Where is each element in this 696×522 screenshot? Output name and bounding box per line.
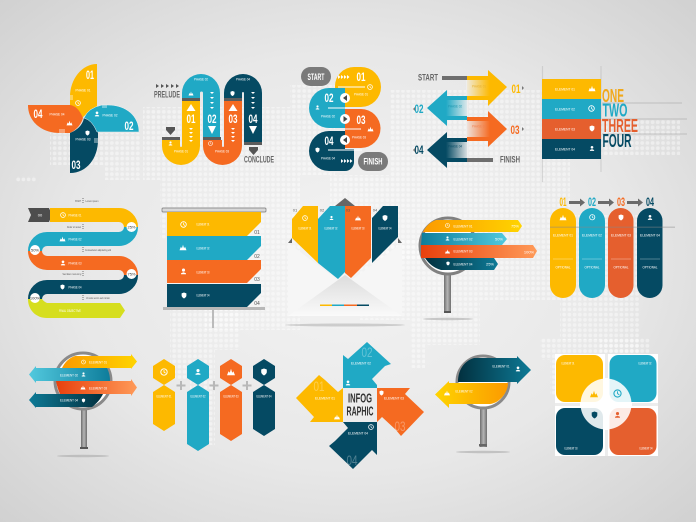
plus signs bbox=[176, 381, 252, 390]
arrow labels: ELEMENT 03 bbox=[384, 396, 405, 400]
number labels: 01 bbox=[356, 70, 366, 84]
start label: START bbox=[308, 72, 325, 82]
strip labels: ELEMENT 01 bbox=[298, 226, 312, 230]
arrow text bbox=[448, 84, 487, 148]
strip numbers bbox=[293, 208, 378, 212]
bar labels: 75% bbox=[511, 224, 519, 228]
phase numbers: PHASE 02 bbox=[194, 76, 209, 82]
phase numbers bbox=[174, 76, 258, 154]
quadrant labels bbox=[562, 360, 653, 450]
orange pill bbox=[608, 208, 634, 298]
start pill bbox=[301, 67, 331, 86]
block labels bbox=[555, 86, 576, 152]
tiny arrows bbox=[189, 92, 255, 142]
quadrant labels: ELEMENT 03 bbox=[564, 446, 578, 450]
pill labels: OPTIONAL bbox=[614, 264, 629, 270]
block labels: ELEMENT 01 bbox=[555, 86, 576, 92]
number labels: 03 bbox=[356, 113, 366, 127]
phase numbers: PHASE 03 bbox=[215, 148, 230, 154]
pill icons bbox=[316, 85, 374, 152]
play glyphs bbox=[343, 95, 348, 143]
magnifier arrows infographic bbox=[29, 353, 137, 457]
percent labels: 100% bbox=[30, 296, 41, 300]
arrow numbers: 01 bbox=[512, 82, 521, 96]
strip numbers: 03 bbox=[346, 208, 351, 212]
quadrant 01 bbox=[556, 355, 603, 402]
percent labels: 75% bbox=[127, 272, 136, 276]
serpentine phases infographic bbox=[154, 74, 274, 166]
pill labels bbox=[553, 232, 661, 270]
teal band bbox=[35, 227, 131, 251]
projection screen infographic bbox=[162, 208, 266, 328]
number labels: 02 bbox=[324, 91, 334, 105]
arrow numbers bbox=[414, 82, 521, 157]
number labels: PHASE 01 bbox=[354, 92, 369, 96]
arrow labels: ELEMENT 03 bbox=[89, 386, 108, 390]
envelope flap bbox=[288, 275, 402, 316]
quadrant infographic bbox=[555, 354, 658, 456]
pinwheel labels: 01 bbox=[86, 68, 94, 82]
handle bbox=[444, 275, 451, 311]
block 01 bbox=[542, 79, 601, 99]
phase numbers: PHASE 04 bbox=[236, 76, 251, 82]
pinwheel labels: 04 bbox=[34, 107, 43, 121]
hexagon labels: ELEMENT 01 bbox=[156, 394, 172, 398]
headings bbox=[560, 195, 654, 209]
arrow numbers: 04 bbox=[414, 143, 424, 157]
block labels: ELEMENT 03 bbox=[555, 126, 576, 132]
teal pill bbox=[579, 208, 605, 298]
hexagon labels: ELEMENT 03 bbox=[224, 394, 239, 398]
start label: START bbox=[418, 72, 438, 84]
lime band bbox=[28, 299, 125, 318]
arrow 03 bbox=[56, 379, 137, 396]
milestone notes: Dolor sit amet bbox=[67, 225, 81, 229]
number labels: PHASE 02 bbox=[321, 114, 336, 118]
milestone notes: Ut wisi enim ad minim bbox=[86, 296, 110, 300]
pill labels: OPTIONAL bbox=[584, 264, 600, 270]
heading arrows bbox=[569, 198, 643, 206]
finish label: FINISH bbox=[500, 154, 520, 166]
bar 04 bbox=[425, 258, 498, 270]
cross bbox=[580, 378, 632, 430]
infographic cross arrows bbox=[296, 342, 424, 469]
orange arrow bbox=[466, 111, 507, 147]
orange petal bbox=[28, 105, 83, 133]
bar 02 bbox=[421, 233, 507, 245]
navy pill bbox=[309, 131, 354, 171]
pinwheel labels: 03 bbox=[72, 158, 81, 172]
yellow arrow bbox=[435, 381, 508, 408]
winding road infographic bbox=[28, 198, 136, 318]
top hexagons bbox=[153, 359, 275, 385]
arrow labels: ELEMENT 01 bbox=[89, 360, 108, 364]
world map dots bbox=[15, 85, 680, 445]
pill labels: OPTIONAL bbox=[642, 264, 658, 270]
screen background bbox=[167, 212, 261, 307]
block 03 bbox=[542, 119, 601, 139]
arrow text: PHASE 02 bbox=[448, 104, 463, 108]
orange band bbox=[35, 251, 131, 275]
milestone notes: Consectetur adipiscing elit bbox=[85, 248, 111, 252]
bar 01 bbox=[423, 220, 522, 232]
band labels bbox=[59, 212, 82, 313]
pinwheel infographic bbox=[28, 64, 139, 173]
center circle bbox=[580, 378, 632, 430]
phase numbers: 02 bbox=[208, 112, 217, 126]
number labels bbox=[321, 70, 369, 160]
milestone notes: Lorem ipsum bbox=[86, 199, 99, 203]
arrow numbers: 02 bbox=[414, 102, 424, 116]
navy pill bbox=[637, 208, 662, 298]
phase numbers: 03 bbox=[228, 112, 238, 126]
start finish pills infographic bbox=[301, 67, 388, 171]
bar labels: ELEMENT 04 bbox=[454, 262, 473, 266]
corner numbers bbox=[254, 230, 260, 307]
handle foot bbox=[80, 447, 88, 449]
pill labels: ELEMENT 01 bbox=[553, 232, 574, 238]
start line bbox=[442, 76, 467, 80]
yellow strip bbox=[292, 206, 318, 263]
shadow line bbox=[550, 226, 675, 228]
strip numbers: 01 bbox=[293, 208, 298, 212]
bar labels: 25% bbox=[486, 262, 494, 266]
teal pill bbox=[309, 88, 345, 128]
corner numbers: 02 bbox=[254, 254, 260, 260]
milestone notes bbox=[62, 199, 111, 300]
arrow labels: ELEMENT 01 bbox=[315, 396, 336, 400]
band 04 bbox=[167, 284, 261, 307]
band icons bbox=[60, 213, 66, 290]
hexagons infographic bbox=[153, 359, 275, 451]
prelude arrows bbox=[156, 84, 179, 88]
phase numbers: 04 bbox=[248, 112, 258, 126]
bar labels: ELEMENT 02 bbox=[454, 236, 473, 242]
stand bbox=[212, 310, 214, 328]
quadrant 04 bbox=[610, 408, 656, 455]
arrow text: PHASE 04 bbox=[448, 144, 463, 148]
pill labels: ELEMENT 02 bbox=[582, 232, 603, 238]
hexagon labels bbox=[156, 394, 272, 398]
center icons bbox=[590, 390, 621, 418]
small pointers bbox=[413, 86, 524, 152]
arrow labels: ELEMENT 04 bbox=[348, 430, 369, 436]
arrow text: PHASE 03 bbox=[472, 124, 487, 128]
quadrant labels: ELEMENT 01 bbox=[562, 360, 575, 366]
navy arrow bbox=[329, 422, 377, 469]
numbered blocks infographic bbox=[542, 66, 687, 182]
optional pills infographic bbox=[550, 195, 675, 298]
navy arch bbox=[224, 74, 262, 142]
arrow labels: ELEMENT 04 bbox=[60, 398, 79, 402]
hexagon icons bbox=[161, 368, 267, 376]
block labels: ELEMENT 04 bbox=[555, 146, 576, 152]
band labels: PHASE 01 bbox=[68, 212, 82, 218]
strip numbers: 04 bbox=[373, 208, 378, 212]
rails bbox=[542, 66, 601, 182]
faint numbers: 04 bbox=[346, 452, 358, 468]
arrow labels: ELEMENT 02 bbox=[60, 372, 79, 378]
band labels: PHASE 03 bbox=[68, 260, 82, 266]
orange strip bbox=[345, 206, 371, 278]
milestone dashes bbox=[82, 198, 84, 301]
arrow labels: ELEMENT 02 bbox=[456, 388, 473, 394]
arrow labels: ELEMENT 02 bbox=[351, 360, 372, 366]
arrow numbers: 03 bbox=[510, 123, 520, 137]
magnifier two arrows infographic bbox=[435, 356, 531, 453]
bar labels: ELEMENT 03 bbox=[454, 248, 473, 254]
navy arrow bbox=[458, 356, 531, 384]
band icons bbox=[180, 222, 186, 298]
band labels bbox=[196, 222, 210, 298]
pill icons bbox=[560, 214, 652, 220]
block labels: ELEMENT 02 bbox=[555, 106, 576, 112]
side corners bbox=[288, 238, 402, 243]
headings: 04 bbox=[646, 195, 654, 209]
band labels: ELEMENT 03 bbox=[196, 270, 210, 274]
pinwheel labels: PHASE 03 bbox=[76, 136, 91, 142]
conclude triangle bbox=[249, 147, 258, 155]
top roller bbox=[162, 208, 266, 212]
yellow pill bbox=[335, 67, 381, 107]
handle foot bbox=[444, 311, 451, 313]
accents bbox=[59, 95, 107, 143]
band 03 bbox=[167, 260, 261, 283]
white lines bbox=[328, 87, 365, 150]
conclude label: CONCLUDE bbox=[244, 154, 274, 166]
band labels: FINAL OBJECTIVE bbox=[59, 308, 81, 313]
bar labels: 50% bbox=[495, 236, 503, 242]
white backing bbox=[555, 354, 658, 456]
magnifier bars infographic bbox=[420, 218, 537, 320]
percent labels: 25% bbox=[127, 224, 136, 230]
pill labels: ELEMENT 03 bbox=[611, 232, 632, 238]
phase numbers: PHASE 01 bbox=[174, 148, 189, 154]
faint numbers: 01 bbox=[314, 378, 325, 394]
faint numbers bbox=[314, 344, 406, 468]
strip icons bbox=[303, 215, 387, 221]
top triangle bbox=[335, 198, 355, 206]
band labels: ELEMENT 04 bbox=[196, 292, 210, 298]
percent labels: 50% bbox=[31, 248, 39, 252]
center title: INFOG bbox=[348, 390, 372, 406]
word labels: THREE bbox=[602, 116, 638, 136]
yellow arrow bbox=[466, 70, 507, 106]
pinwheel labels: 02 bbox=[124, 119, 134, 133]
pinwheel labels bbox=[34, 68, 134, 172]
center title bbox=[346, 390, 374, 418]
arrow 04 bbox=[29, 392, 103, 408]
handle bbox=[81, 410, 87, 447]
handle bbox=[480, 409, 487, 447]
start tag label: 00 bbox=[38, 212, 43, 218]
center square bbox=[343, 388, 377, 422]
yellow band bbox=[50, 215, 131, 227]
pill labels: ELEMENT 04 bbox=[640, 232, 661, 238]
arrow labels bbox=[60, 360, 108, 402]
band 01 bbox=[167, 212, 261, 236]
prelude triangle bbox=[166, 127, 175, 135]
bar labels: ELEMENT 01 bbox=[454, 224, 473, 228]
arrow labels bbox=[456, 364, 510, 394]
hexagon labels: ELEMENT 02 bbox=[190, 394, 206, 398]
pinwheel labels: PHASE 04 bbox=[50, 112, 65, 116]
word labels: FOUR bbox=[602, 131, 632, 151]
small arrows bbox=[338, 75, 352, 163]
pinwheel icons bbox=[66, 101, 99, 136]
start tag bbox=[28, 208, 52, 222]
finish pill bbox=[358, 152, 388, 171]
quadrant labels: ELEMENT 04 bbox=[640, 446, 653, 450]
shadow bbox=[423, 318, 473, 320]
orange pill bbox=[345, 109, 380, 148]
bar labels: 100% bbox=[524, 250, 535, 254]
headings: 01 bbox=[560, 195, 567, 209]
milestone notes: START bbox=[75, 199, 81, 203]
arrow labels bbox=[315, 360, 405, 436]
headings: 03 bbox=[617, 195, 625, 209]
corner numbers: 03 bbox=[254, 277, 260, 283]
color bar bbox=[320, 304, 369, 306]
grey bars bbox=[162, 98, 262, 145]
teal arch bbox=[182, 74, 220, 137]
corner numbers: 04 bbox=[254, 301, 260, 307]
block 02 bbox=[542, 99, 601, 119]
center title: RAPHIC bbox=[346, 404, 374, 418]
teal petal bbox=[84, 105, 139, 132]
teal arrow bbox=[343, 342, 391, 388]
envelope body bbox=[288, 243, 402, 316]
four arrows infographic bbox=[413, 70, 524, 168]
arrow icons bbox=[334, 380, 384, 429]
arrow icons bbox=[444, 366, 520, 395]
arrow icons bbox=[80, 360, 86, 402]
quadrant 02 bbox=[610, 355, 656, 402]
prelude label: PRELUDE bbox=[154, 90, 180, 100]
corner numbers: 01 bbox=[254, 230, 260, 236]
orange arrow bbox=[377, 388, 424, 436]
yellow petal bbox=[70, 64, 97, 120]
divider bbox=[555, 354, 658, 456]
bar labels bbox=[454, 224, 535, 266]
navy arrow bbox=[427, 132, 468, 168]
band labels: ELEMENT 02 bbox=[196, 246, 210, 250]
arrow labels: ELEMENT 01 bbox=[492, 364, 510, 368]
quadrant 03 bbox=[556, 408, 603, 455]
handle foot bbox=[479, 444, 487, 446]
word labels bbox=[602, 86, 638, 151]
envelope shadow bbox=[285, 324, 405, 326]
percent labels bbox=[30, 224, 136, 300]
teal arrow bbox=[427, 90, 468, 126]
milestone notes: Sed diam nonummy bbox=[62, 272, 82, 276]
faint numbers: 03 bbox=[394, 418, 406, 434]
navy band bbox=[35, 275, 131, 299]
band 02 bbox=[167, 236, 261, 260]
yellow pill bbox=[550, 208, 576, 298]
hexagon labels: ELEMENT 04 bbox=[256, 394, 272, 398]
shadow bbox=[456, 451, 510, 453]
envelope infographic bbox=[285, 198, 405, 326]
phase icons bbox=[169, 91, 234, 146]
arrow 01 bbox=[62, 354, 137, 369]
percent circles bbox=[30, 222, 136, 303]
quadrant labels: ELEMENT 02 bbox=[638, 360, 652, 366]
arrow text: PHASE 01 bbox=[472, 84, 487, 88]
white triangles bbox=[186, 104, 257, 134]
lens ring bbox=[55, 353, 111, 409]
bar 03 bbox=[421, 245, 537, 258]
block shadows bbox=[602, 102, 687, 135]
teal strip bbox=[318, 206, 345, 279]
lower columns bbox=[153, 385, 275, 451]
arrow 02 bbox=[29, 366, 110, 383]
number labels: 04 bbox=[324, 134, 334, 148]
number labels: PHASE 03 bbox=[352, 134, 367, 140]
strip labels: ELEMENT 02 bbox=[324, 226, 338, 230]
pill dividers bbox=[553, 258, 660, 260]
word labels: ONE bbox=[602, 86, 624, 106]
headings: 02 bbox=[588, 195, 596, 209]
strip numbers: 02 bbox=[320, 208, 325, 212]
band labels: PHASE 02 bbox=[68, 236, 82, 242]
strip labels: ELEMENT 04 bbox=[378, 226, 392, 230]
word labels: TWO bbox=[602, 100, 628, 120]
block 04 bbox=[542, 139, 601, 159]
band labels: ELEMENT 01 bbox=[196, 222, 210, 226]
phase numbers: 01 bbox=[186, 112, 196, 126]
pinwheel labels: PHASE 02 bbox=[102, 112, 118, 118]
lens ring bbox=[457, 356, 509, 408]
yellow U bbox=[162, 100, 200, 165]
block icons bbox=[588, 86, 596, 151]
number labels: PHASE 04 bbox=[321, 156, 336, 160]
navy strip bbox=[372, 206, 398, 263]
pinwheel labels: PHASE 01 bbox=[76, 88, 91, 92]
finish label: FINISH bbox=[364, 156, 382, 166]
finish line bbox=[467, 158, 493, 162]
pill labels: OPTIONAL bbox=[556, 264, 571, 270]
bar icons bbox=[445, 224, 450, 266]
shadow bbox=[57, 455, 109, 457]
lens ring bbox=[420, 218, 476, 274]
band labels: PHASE 04 bbox=[68, 284, 82, 290]
faint numbers: 02 bbox=[362, 344, 373, 360]
play circles bbox=[340, 93, 350, 145]
strip labels bbox=[298, 226, 392, 230]
bottom bar bbox=[163, 307, 265, 310]
strip labels: ELEMENT 03 bbox=[352, 226, 365, 230]
yellow arrow bbox=[296, 375, 343, 422]
navy petal bbox=[70, 118, 98, 173]
orange U bbox=[203, 101, 242, 165]
